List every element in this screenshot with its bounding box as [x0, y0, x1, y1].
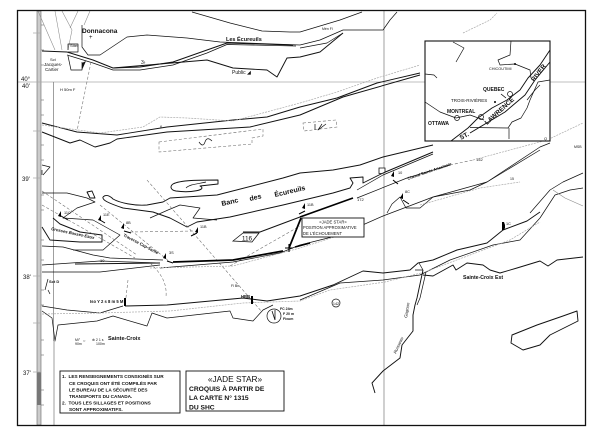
south shore place labels: Ruisseau: [392, 336, 405, 354]
south shore place labels: Gagnon: [403, 302, 411, 318]
buoys and markers: 3S: [169, 251, 174, 255]
Donnacona place labels: Cartier: [45, 67, 59, 72]
south shore place labels: Sainte-Croix: [108, 336, 141, 342]
navigation channels and range lines: Grosses Basses-Eaux: [51, 226, 96, 240]
south shore place labels: 90m: [75, 342, 82, 346]
south shore place labels: HBB: [241, 294, 250, 299]
Donnacona place labels: H 50m F: [60, 87, 76, 92]
inset map: St. Lawrence River: MONTREAL: [447, 109, 475, 115]
river shoreline north: [42, 13, 497, 152]
inset map: St. Lawrence River: CHICOUTIMI: [489, 67, 512, 71]
notes box: TRANSPORTS DU CANADA.: [69, 394, 132, 399]
Donnacona place labels: Donnacona: [82, 28, 118, 35]
Donnacona place labels: Les Écureuils: [226, 35, 262, 43]
notes box: LE BUREAU DE LA SÉCURITÉ DES: [69, 386, 147, 392]
Banc des Écureuils: des: [249, 193, 262, 203]
buoys and markers: 8B: [126, 221, 131, 225]
notes box: 1. LES RENSEIGNEMENTS CONSIGNÉS SUR: [62, 372, 164, 379]
latitude labels: [21, 77, 31, 377]
inset map: St. Lawrence River: LAWRENCE: [484, 96, 516, 126]
callout: grounding position: DE L'ÉCHOUEMENT: [303, 231, 342, 236]
buoys and markers: 1C: [506, 222, 511, 226]
buoys and markers: 11B: [307, 203, 314, 207]
south shore place labels: 100m: [96, 342, 105, 346]
north shore: Donnacona and Les Écureuils: [38, 11, 397, 131]
buoys and markers: 11C: [64, 211, 71, 215]
notes box: CE CROQUIS ONT ÉTÉ COMPILÉS PAR: [69, 379, 158, 386]
title box: «JADE STAR»: [208, 374, 263, 384]
Donnacona place labels: +: [89, 35, 93, 41]
south shore place labels: Sct D: [49, 279, 59, 284]
south shore place labels: FC 24m: [280, 307, 293, 311]
title box: CROQUIS À PARTIR DE: [189, 384, 265, 393]
buoys and markers: 10: [398, 171, 402, 175]
inset map: St. Lawrence River: ST.: [459, 131, 470, 142]
callout: grounding position: POSITION APPROXIMATIVE: [303, 225, 357, 230]
south shore place labels: MSB: [574, 145, 582, 149]
Banc des Écureuils: Banc: [221, 197, 239, 208]
navigation channels and range lines: 10: [100, 258, 105, 263]
south shore and Sainte-Croix: [42, 212, 583, 393]
latitude labels: 38': [23, 275, 31, 281]
navigation channels and range lines: 172: [357, 197, 364, 202]
south shore and Sainte-Croix: 142: [333, 302, 339, 306]
latitude labels: 40°: [21, 77, 31, 83]
inset map: St. Lawrence River: TROIS-RIVIÈRES: [451, 97, 487, 103]
latitude labels: 39': [22, 177, 30, 183]
Banc des Écureuils: Écureuils: [273, 183, 306, 199]
title box: LA CARTE N° 1315: [189, 394, 249, 402]
latitude labels: 40': [22, 84, 30, 90]
Donnacona place labels: Public ◢: [232, 70, 251, 76]
south shore place labels: Fixum: [283, 317, 293, 321]
callout: grounding position: «JADE STAR»: [319, 220, 347, 224]
Donnacona place labels: Mén Fl: [322, 27, 333, 31]
south shore place labels: ⊕ 2 1 s: [92, 338, 104, 342]
navigation channels and range lines: [42, 123, 583, 312]
Donnacona place labels: Jacques-: [44, 62, 63, 67]
south shore place labels: Mi°: [75, 338, 81, 342]
latitude labels: 37': [23, 371, 31, 377]
notes box: [60, 371, 180, 413]
callout: grounding position: [285, 218, 364, 252]
notes box: SONT APPROXIMATIFS.: [69, 407, 123, 412]
notes box: 2. TOUS LES SILLAGES ET POSITIONS: [62, 400, 151, 406]
south shore place labels: Iso Y 2 s 8 m 5 M: [90, 299, 124, 304]
title box: DU SHC: [189, 404, 215, 412]
Banc des Écureuils: [42, 145, 433, 260]
river shoreline north: 6: [160, 124, 163, 129]
south shore place labels: Sainte-Croix Est: [463, 275, 503, 281]
inset map: St. Lawrence River: [425, 41, 550, 142]
inset map: St. Lawrence River: RIVER: [530, 63, 548, 83]
Donnacona place labels: Sct: [50, 57, 57, 62]
Donnacona place labels: [44, 27, 333, 92]
buoys and markers: [58, 171, 511, 263]
inset map: St. Lawrence River: OTTAWA: [428, 121, 449, 127]
Donnacona place labels: 3›: [141, 60, 146, 66]
depth marker 116: 116: [242, 236, 253, 242]
south shore place labels: ○: [83, 338, 86, 343]
navigation channels and range lines: Chenal Sainte Anastasie: [407, 161, 453, 181]
south shore place labels: [49, 145, 582, 354]
title box: [186, 371, 284, 412]
buoys and markers: 8C: [405, 190, 410, 194]
buoys and markers: 11E: [103, 213, 110, 217]
navigation channels and range lines: Traverse Cap-Santé: [123, 232, 160, 256]
depth marker 116: [233, 233, 259, 242]
Donnacona place labels: Sttér: [70, 43, 79, 48]
inset map: St. Lawrence River: Q: [544, 136, 547, 141]
south shore place labels: Fl Bn: [231, 284, 239, 288]
buoys and markers: 11B: [200, 225, 207, 229]
inset map: St. Lawrence River: QUEBEC: [483, 87, 505, 93]
navigation channels and range lines: 152: [476, 157, 483, 162]
navigation channels and range lines: 15: [510, 177, 514, 181]
south shore place labels: F 20 m: [283, 312, 294, 316]
